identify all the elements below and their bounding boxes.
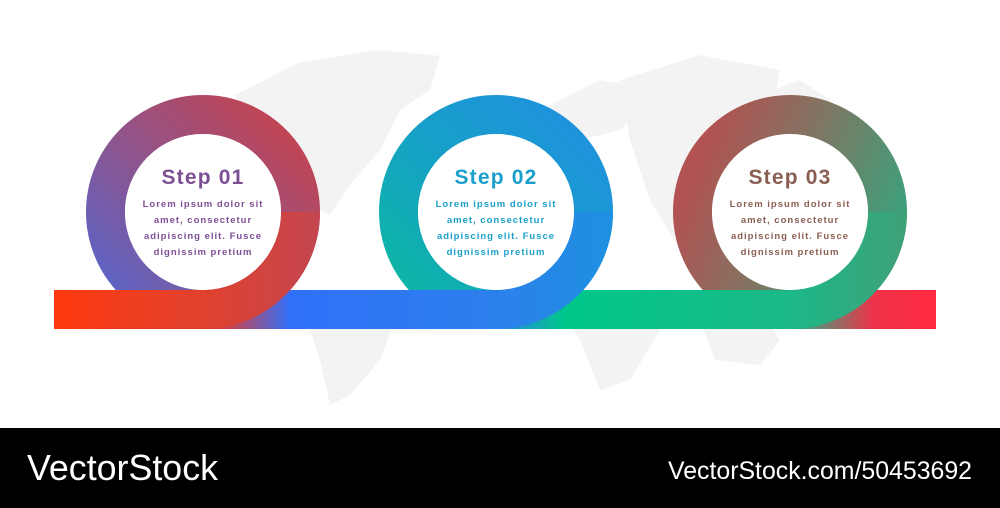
step 02 text: amet, consectetur	[447, 215, 545, 226]
step 02 ring (back)	[398, 114, 594, 310]
step 01 ring (back)	[106, 114, 300, 310]
footer bar: VectorStock.com/50453692	[668, 457, 972, 485]
step 03 text: amet, consectetur	[741, 215, 839, 226]
world map background	[235, 50, 830, 405]
step 03 text	[730, 166, 850, 258]
step 01 text: Lorem ipsum dolor sit	[143, 199, 263, 210]
step 03 text: Step 03	[748, 166, 832, 189]
step 03 ring (back)	[692, 114, 888, 310]
inner discs	[125, 134, 868, 290]
step 02 text: adipiscing elit. Fusce	[437, 231, 555, 242]
step 02 text: Lorem ipsum dolor sit	[436, 199, 556, 210]
ring front segments	[205, 212, 907, 329]
step 02 text: Step 02	[454, 166, 538, 189]
footer bar	[0, 428, 1000, 508]
step 01 text: dignissim pretium	[154, 247, 252, 258]
timeline band	[54, 290, 936, 329]
footer bar: VectorStock	[27, 447, 219, 488]
step 01 text	[143, 166, 263, 258]
step 01 text: adipiscing elit. Fusce	[144, 231, 262, 242]
step 02 text	[436, 166, 556, 258]
step 01 text: amet, consectetur	[154, 215, 252, 226]
step 03 text: Lorem ipsum dolor sit	[730, 199, 850, 210]
step 01 text: Step 01	[161, 166, 245, 189]
step 03 text: adipiscing elit. Fusce	[731, 231, 849, 242]
step 03 text: dignissim pretium	[741, 247, 839, 258]
step 02 text: dignissim pretium	[447, 247, 545, 258]
